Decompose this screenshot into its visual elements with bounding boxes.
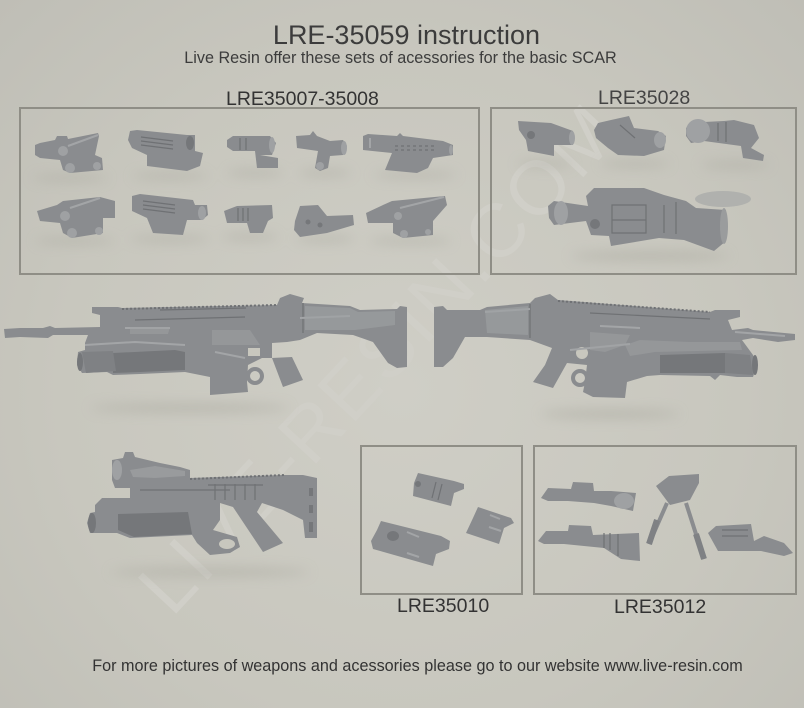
icons: row 1 sights <box>35 130 453 173</box>
rifle: left <box>4 294 407 395</box>
icons: LRE35028 sights <box>518 116 764 251</box>
heading: LRE35028: LRE35028 <box>598 87 690 109</box>
icons: row 2 sights <box>37 194 447 238</box>
heading: LRE35012: LRE35012 <box>614 596 706 618</box>
watermark: LIVE-RESIN.COM <box>122 89 635 630</box>
panel: LRE35007-35008 frame <box>19 107 480 275</box>
heading: LRE35010: LRE35010 <box>397 595 489 617</box>
footer text: For more pictures of weapons and acessories please go to our website www.live-resin.com <box>92 657 743 675</box>
subtitle: Live Resin offer these sets of acessories for the basic SCAR <box>184 49 617 67</box>
panel: LRE35012 frame <box>533 445 797 595</box>
title: LRE-35059 instruction <box>273 20 540 50</box>
icons: LRE35010 boxes <box>371 473 514 566</box>
panel: LRE35010 frame <box>360 445 523 595</box>
icons: LRE35012 accessories <box>538 474 793 561</box>
rifle: right <box>434 294 795 398</box>
panel: LRE35028 frame <box>490 107 797 275</box>
ground shadows <box>32 161 770 576</box>
heading: LRE35007-35008: LRE35007-35008 <box>226 88 379 110</box>
rifle: angled assembled <box>87 452 317 555</box>
